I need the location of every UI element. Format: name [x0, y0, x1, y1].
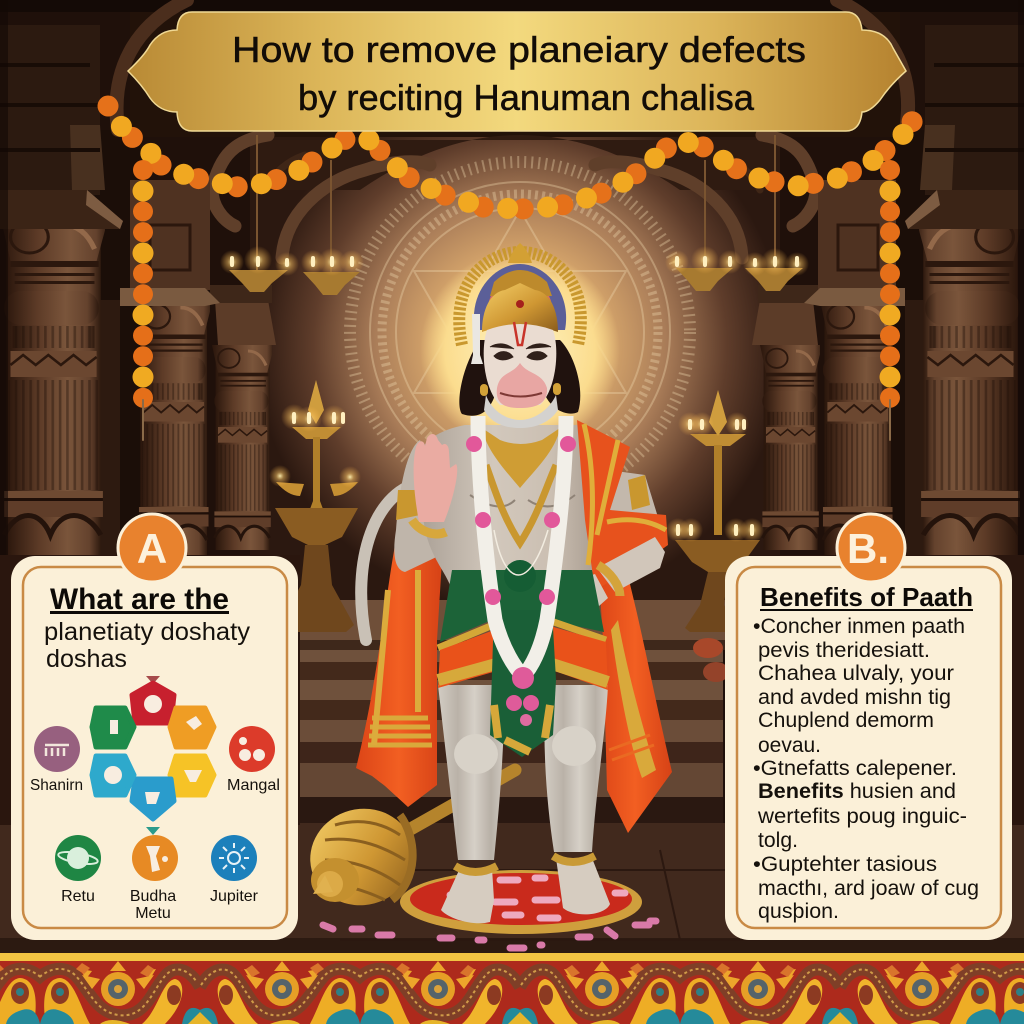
heading B: Benefits of Paath — [760, 582, 973, 612]
standing lamp left — [269, 380, 361, 632]
round flower platform — [400, 870, 642, 934]
hanging lamps — [220, 135, 809, 295]
sash knot — [504, 560, 536, 592]
necklaces — [482, 428, 560, 575]
heading A: What are the — [50, 583, 229, 616]
dhoti hem — [438, 664, 608, 682]
title banner — [128, 12, 906, 131]
green dhoti — [440, 570, 604, 642]
benefits list: •Gtnefatts calepener. — [753, 757, 957, 780]
tilak — [514, 322, 526, 345]
bottom border — [0, 953, 1024, 1024]
dhoti gold waist — [438, 620, 606, 648]
columns right — [752, 0, 1024, 560]
beard — [484, 395, 558, 428]
benefits list: Chuplend demorm — [758, 709, 934, 732]
tassel — [471, 314, 483, 364]
benefits list: macthı, ard joaw of cug — [758, 877, 979, 900]
icon: Shanirn — [34, 726, 80, 772]
crown rainbow — [474, 264, 566, 330]
temple arches — [117, 0, 908, 258]
icon: Retu — [55, 835, 101, 881]
anklets — [455, 856, 595, 872]
halo glow — [420, 250, 620, 450]
benefits list: qusþion. — [758, 900, 839, 923]
right upper arm — [608, 470, 665, 570]
tail — [361, 482, 425, 640]
mouth — [500, 393, 542, 396]
benefits list: Chahea ulvaly, your — [758, 662, 954, 685]
badge B: B. — [847, 525, 889, 572]
right bracelet — [598, 565, 620, 596]
badge A — [118, 514, 186, 582]
crown dome — [490, 270, 552, 296]
green drop cloth — [490, 610, 556, 757]
benefits list — [753, 615, 979, 923]
crown spiked halo — [459, 252, 581, 345]
panel B: benefits of paath — [725, 514, 1012, 940]
heading underline — [760, 609, 973, 611]
floor and steps — [0, 555, 1024, 953]
label Jupiter: Jupiter — [210, 888, 259, 905]
label Budha Metu: Budha — [130, 888, 176, 905]
legs — [438, 685, 608, 860]
hair — [459, 340, 580, 416]
earrings — [484, 387, 557, 392]
icon: Mangal — [229, 726, 275, 772]
benefits list: •Concher inmen paath — [753, 615, 965, 638]
label Shanirn: Shanirn — [30, 777, 83, 794]
icon: Jupiter — [211, 835, 257, 881]
benefits list: •Guptehter tasious — [753, 853, 937, 876]
figure: Hanuman — [356, 243, 672, 923]
hexagon wheel — [92, 676, 214, 835]
subheading line 1: planetiaty doshaty — [44, 618, 251, 646]
mandala behind the figure — [350, 162, 690, 502]
benefits list: and avded mishn tig — [758, 686, 951, 709]
right hand — [555, 574, 608, 615]
crown orange inlay — [487, 275, 553, 320]
marigold garland — [108, 106, 922, 440]
mace — [299, 770, 515, 917]
raised palm — [414, 434, 457, 522]
right forearm — [597, 537, 665, 592]
columns left — [0, 0, 276, 560]
benefits list: Benefits husien and — [758, 780, 956, 803]
benefits list: pevis theridesiatt. — [758, 639, 930, 662]
torso — [415, 425, 610, 590]
feet — [441, 858, 610, 923]
badge B — [837, 514, 905, 582]
subheading line 2: doshas — [46, 645, 127, 673]
title line 2: by reciting Hanuman chalisa — [298, 77, 755, 118]
crown jewel — [516, 300, 524, 308]
benefits list: tolg. — [758, 829, 798, 852]
cloth gold trim — [494, 705, 550, 752]
panel A: what are the doshas — [11, 514, 298, 940]
face — [484, 324, 556, 405]
left scarf — [356, 545, 442, 807]
label Budha Metu: Metu — [135, 905, 171, 922]
shoulder drape — [577, 420, 668, 590]
orange dhoti — [438, 626, 608, 690]
label Mangal: Mangal — [227, 777, 280, 794]
label Retu: Retu — [61, 888, 95, 905]
flower garland — [466, 416, 576, 726]
raised arm upper — [394, 440, 450, 572]
scattered petals — [323, 921, 656, 948]
right scarf lower — [598, 560, 672, 833]
standing lamp right — [666, 390, 764, 682]
benefits list: oevau. — [758, 734, 821, 757]
benefits list: wertefits poug inguic- — [757, 805, 967, 828]
crown band — [482, 283, 558, 332]
icon: Budha — [132, 835, 178, 881]
crown finial — [508, 243, 532, 263]
chest shading — [470, 495, 575, 585]
muzzle — [497, 363, 547, 408]
badge A: A — [137, 525, 167, 572]
title line 1: How to remove planeiary defects — [232, 29, 806, 70]
raised forearm bracelet — [412, 520, 446, 534]
arm bands — [396, 475, 650, 520]
eyes and brows — [490, 344, 551, 360]
